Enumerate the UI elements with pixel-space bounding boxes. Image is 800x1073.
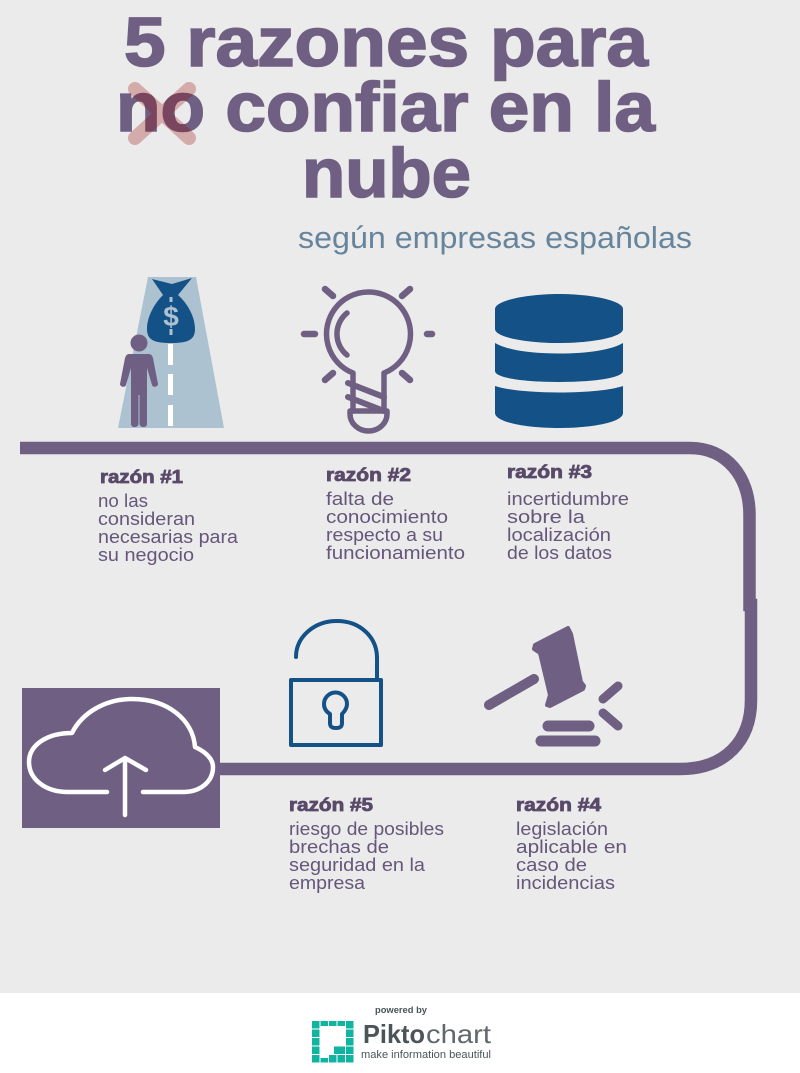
title: 5 razones para [124, 3, 649, 81]
text: reason 3: de los datos [507, 543, 612, 563]
title [116, 3, 656, 212]
icon: open padlock [291, 621, 381, 745]
text: reason 4: caso de [516, 855, 587, 875]
text: reason 2: conocimiento [326, 507, 448, 527]
icon: database [495, 294, 623, 428]
title: no confiar en la [116, 68, 656, 146]
subtitle: según empresas españolas [298, 220, 692, 255]
text: reason 3: incertidumbre [507, 489, 629, 509]
text: reason 3: localización [507, 525, 611, 545]
text: reason 1: no las [98, 491, 148, 511]
text: reason 1 [98, 467, 239, 565]
text: reason 1: necesarias para [98, 527, 239, 547]
footer: Piktochart branding [0, 993, 800, 1073]
text: reason 1: su negocio [98, 545, 194, 565]
text: reason 4: legislación [516, 819, 608, 839]
text: reason 5: seguridad en la [289, 855, 426, 875]
icon: gavel [489, 628, 618, 741]
text: reason 1: razón #1 [100, 467, 183, 487]
footer: Piktochart branding: chart [426, 1019, 492, 1049]
timeline path [20, 448, 751, 769]
text: reason 2: respecto a su [326, 525, 443, 545]
text: reason 2: funcionamiento [326, 543, 465, 563]
text: reason 4: incidencias [516, 873, 615, 893]
footer: Piktochart branding: Pikto [363, 1019, 425, 1049]
text: reason 5: brechas de [289, 837, 389, 857]
icon: red cross over the word no [135, 89, 189, 138]
icon: road with money bag and person [118, 277, 224, 428]
text: reason 2: razón #2 [326, 465, 411, 485]
text: reason 2: falta de [326, 489, 394, 509]
text: reason 3 [507, 462, 629, 563]
text: reason 4: razón #4 [516, 795, 601, 815]
text: reason 5: empresa [289, 873, 366, 893]
footer: Piktochart branding: powered by [375, 1005, 428, 1016]
text: reason 3: sobre la [507, 507, 586, 527]
text: reason 3: razón #3 [507, 462, 592, 482]
text: reason 1: consideran [98, 509, 195, 529]
text: reason 4: aplicable en [516, 837, 627, 857]
icon: cloud upload panel [22, 688, 220, 828]
text: reason 5: razón #5 [289, 795, 373, 815]
title: nube [302, 134, 471, 212]
icon: road with money bag and person: $ [163, 301, 179, 332]
text: reason 5: riesgo de posibles [289, 819, 444, 839]
text: reason 4 [516, 795, 627, 893]
footer: Piktochart branding: make information beautiful [361, 1049, 491, 1061]
text: reason 2 [326, 465, 465, 563]
text: reason 5 [289, 795, 444, 893]
icon: light bulb [304, 289, 432, 431]
